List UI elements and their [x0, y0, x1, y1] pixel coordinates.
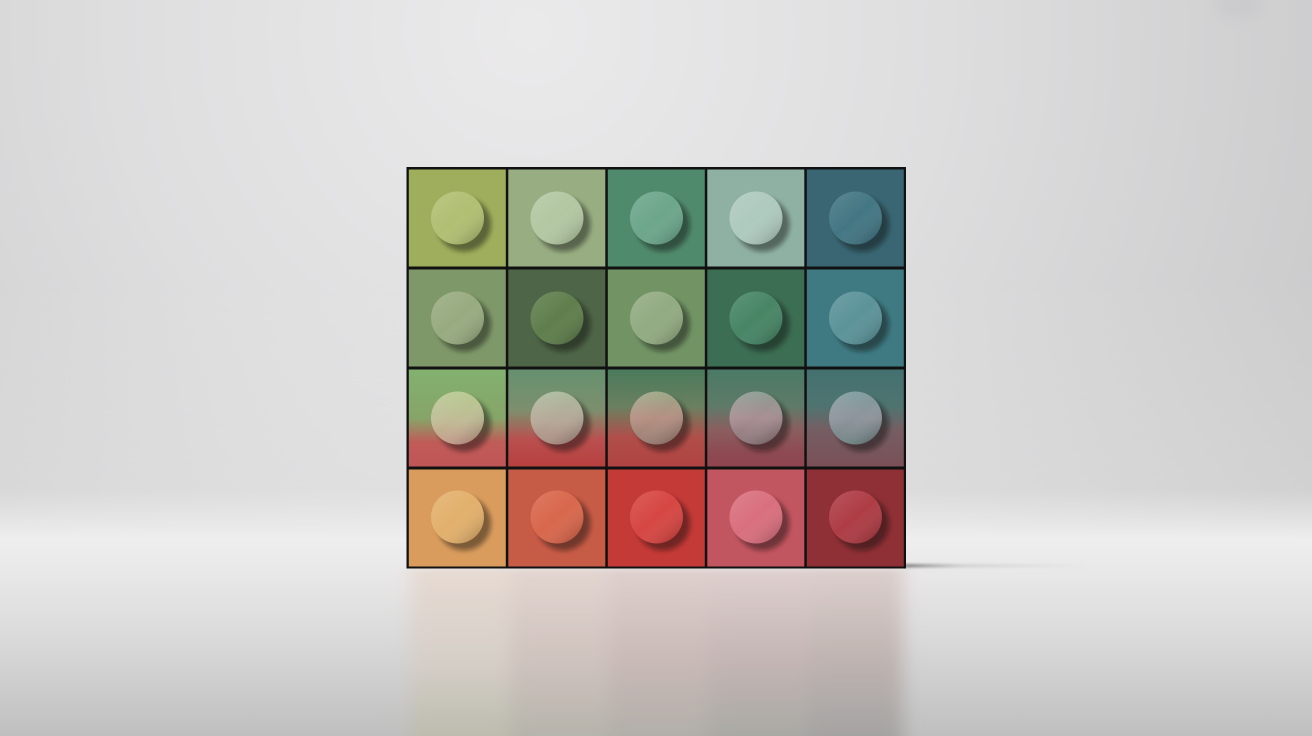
knobs row 1 — [431, 192, 882, 244]
knobs row 2 — [431, 292, 882, 344]
floor — [0, 490, 1312, 736]
row 3 tiles — [409, 370, 904, 466]
floor reflection — [410, 569, 903, 736]
knob highlights — [431, 192, 882, 544]
row 1 tiles — [409, 170, 904, 266]
knob shadows — [437, 198, 889, 550]
knobs row 4 — [431, 490, 882, 544]
grid backing — [406, 167, 906, 568]
knobs row 3 — [431, 392, 882, 444]
row 2 tiles — [409, 270, 904, 366]
row 4 tiles — [409, 470, 904, 566]
contact shadow — [905, 564, 1095, 568]
lower wall lift — [0, 280, 1312, 545]
tile grid — [406, 167, 906, 568]
top right smudge — [1214, 0, 1262, 20]
